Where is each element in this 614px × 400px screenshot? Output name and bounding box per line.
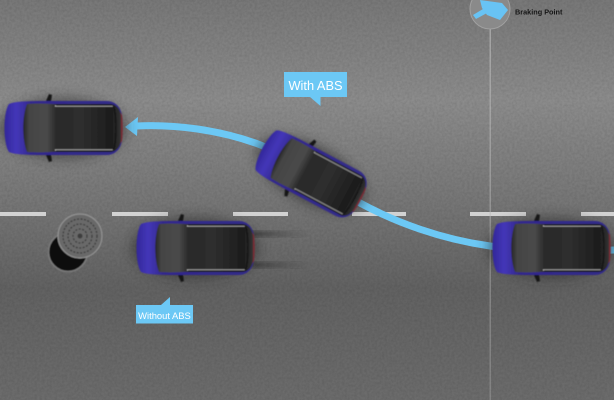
car: at braking point xyxy=(487,214,614,282)
arrow: with ABS trajectory xyxy=(125,117,614,251)
car: without ABS xyxy=(131,214,259,282)
lane dashes xyxy=(0,212,614,216)
callout: With ABS xyxy=(284,72,347,106)
icon: braking point badge xyxy=(470,0,510,29)
skid marks xyxy=(250,231,308,268)
braking point line xyxy=(490,28,491,400)
car: after braking with ABS, left xyxy=(0,94,127,162)
car: swerving with ABS, centre xyxy=(243,118,379,230)
braking point label: Braking Point xyxy=(515,8,563,16)
callout: Without ABS: Without ABS xyxy=(138,310,191,321)
callout: With ABS: With ABS xyxy=(288,78,343,93)
icon: manhole xyxy=(48,214,102,272)
callout: Without ABS xyxy=(136,297,193,324)
